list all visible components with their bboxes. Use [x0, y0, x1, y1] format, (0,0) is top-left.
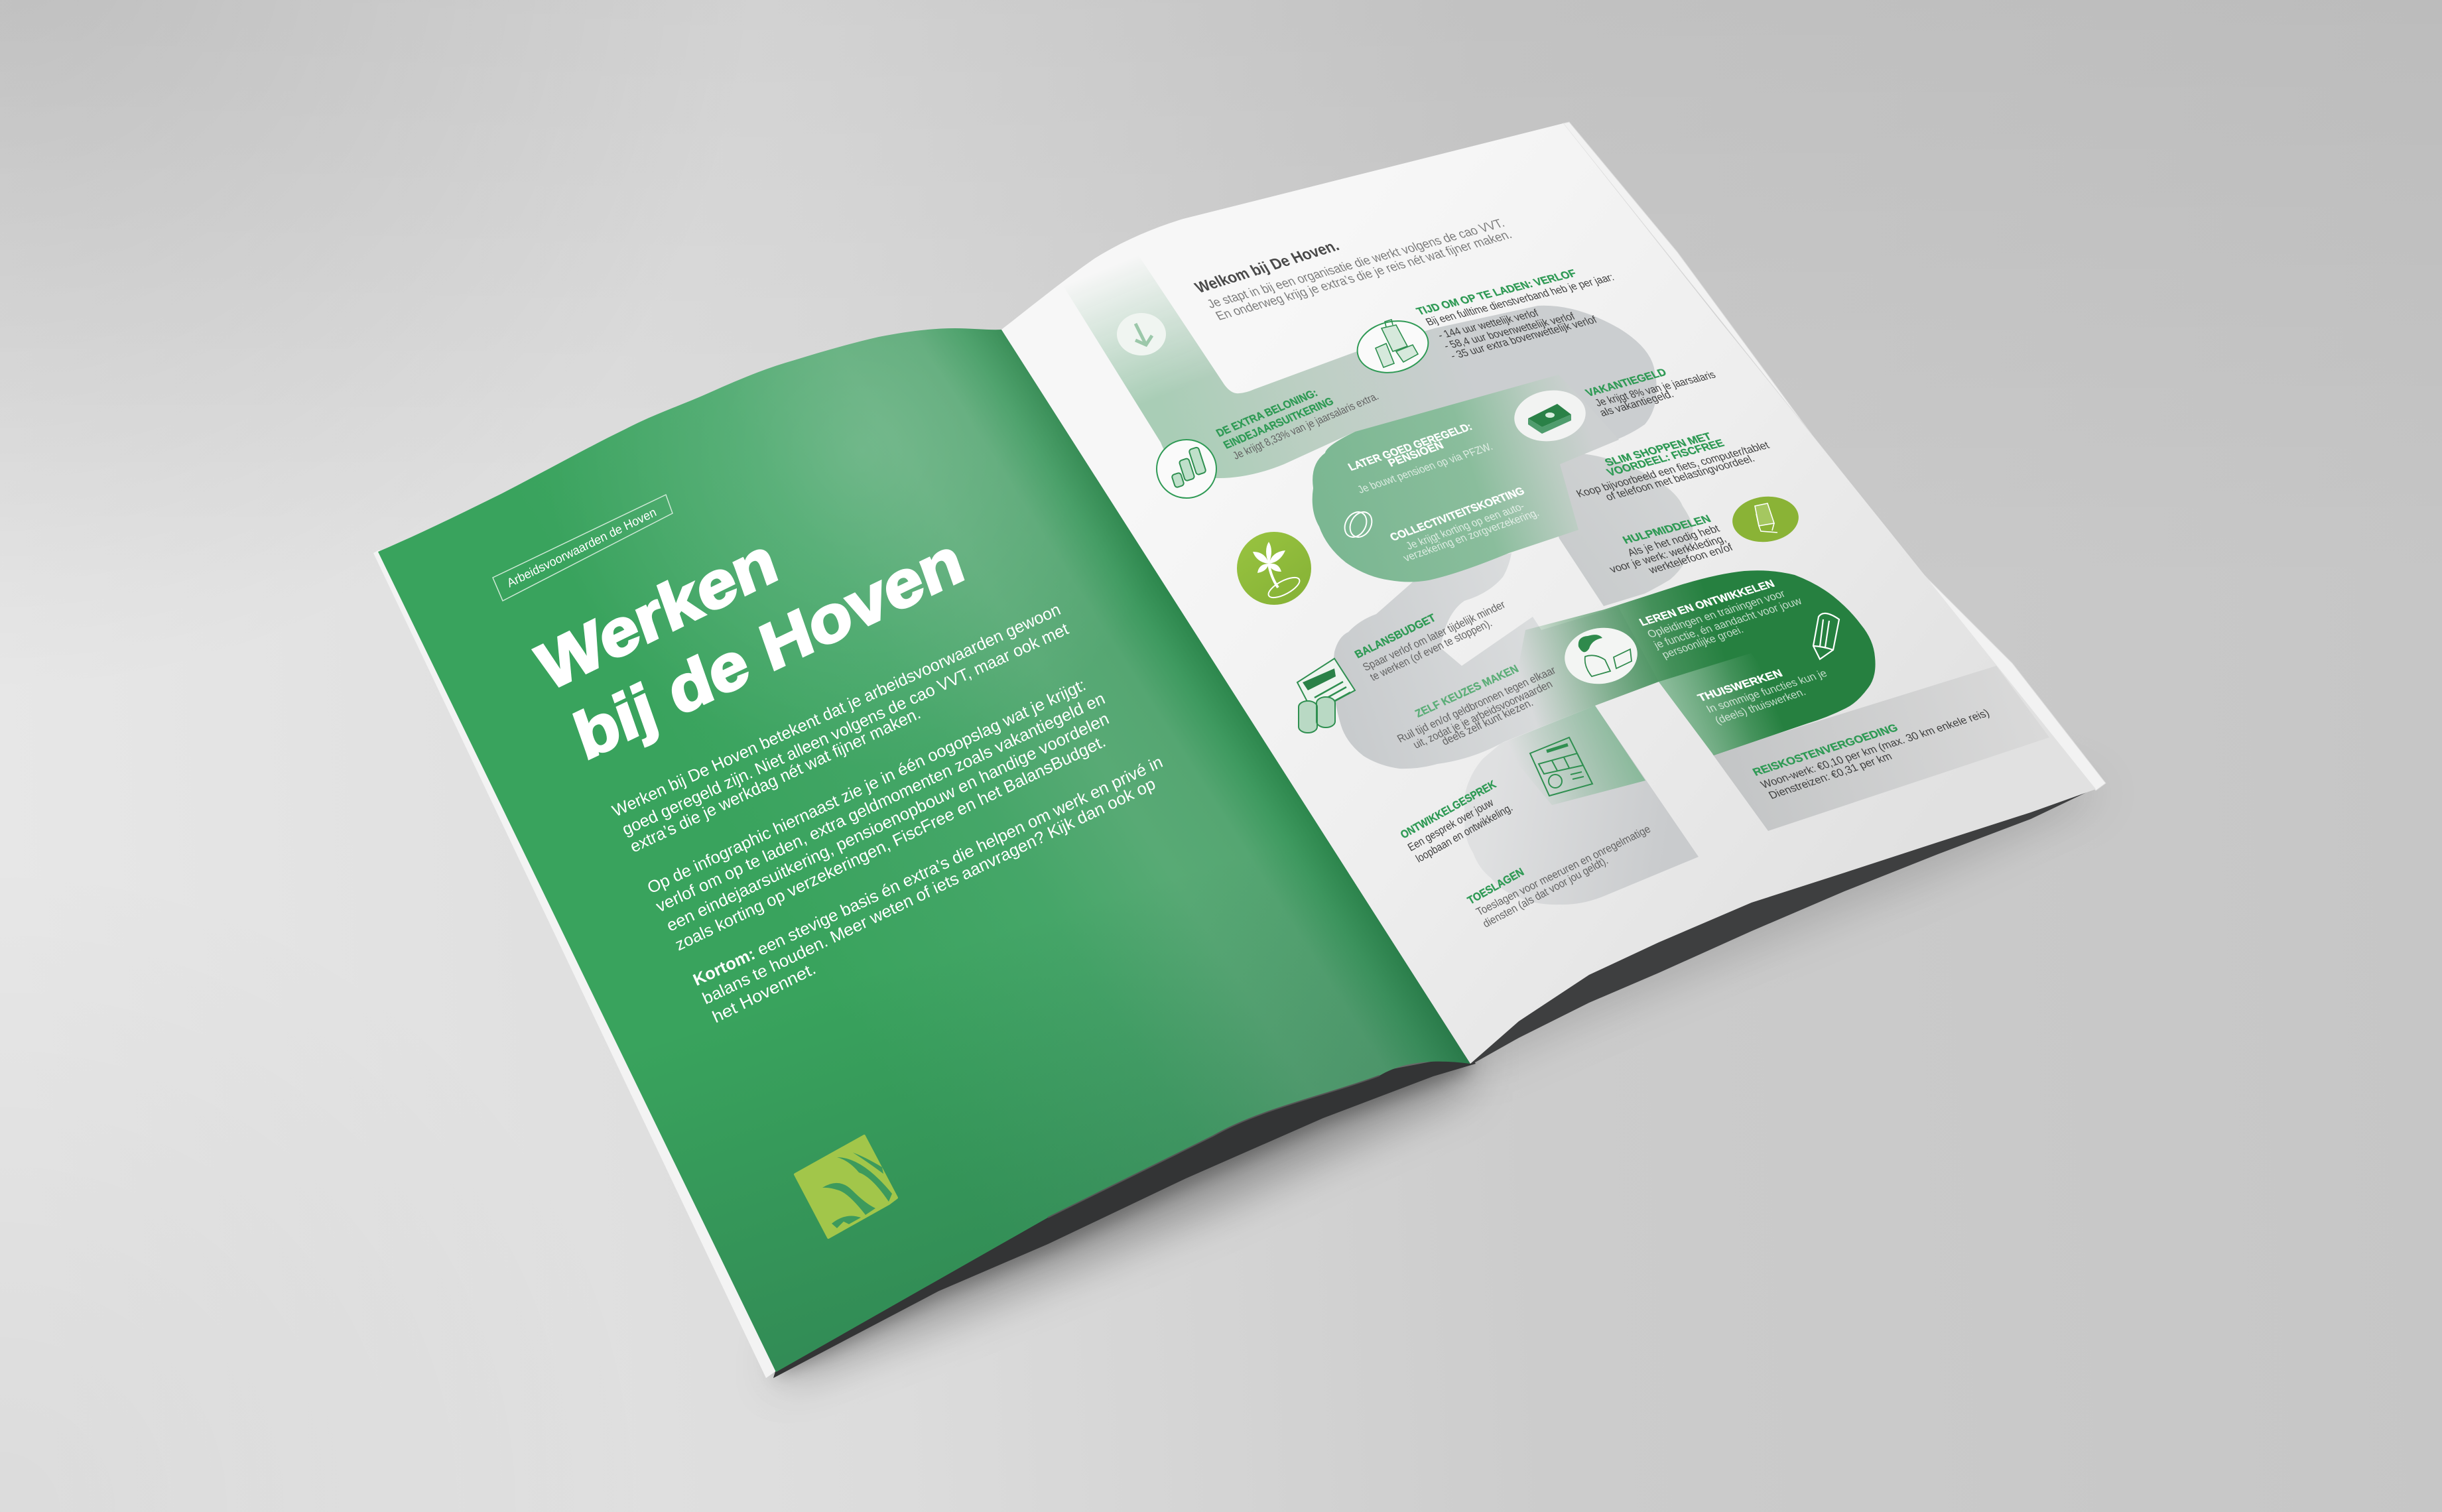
item: zelf keuzes maken: uit, zodat je je arbeidsvoorwaarden: [1411, 678, 1555, 751]
dark underside left: [773, 1054, 1476, 1378]
item: fiscfree: Koop bijvoorbeeld een fiets, computer/tablet: [1574, 440, 1772, 500]
icon: arrow down: [1117, 313, 1166, 355]
item: leren en ontwikkelen: je functie, én aandacht voor jouw: [1651, 595, 1805, 651]
serpentine band: dark green leren block: [1504, 570, 1876, 755]
item: verlof: Bij een fulltime dienstverband heb je per jaar:: [1424, 272, 1616, 328]
item: pensioen: LATER GOED GEREGELD:: [1346, 420, 1474, 473]
serpentine band: start: [1070, 267, 1657, 478]
right paper stack: [1563, 122, 2106, 790]
item: reiskostenvergoeding: Dienstreizen: €0,31 per km: [1766, 750, 1894, 802]
item: thuiswerken: In sommige functies kun je: [1704, 667, 1829, 716]
icon: pencil: [1813, 613, 1839, 659]
second paragraph: zoals korting op verzekeringen, FiscFree en het BalansBudget.: [673, 732, 1108, 954]
intro paragraph: extra’s die je werkdag nét wat fijner maken.: [627, 704, 923, 856]
panel: left green page: [378, 328, 1470, 1372]
item: reiskostenvergoeding: REISKOSTENVERGOEDING: [1750, 722, 1900, 779]
item: hulpmiddelen: voor je werk: werkkleding,: [1608, 533, 1728, 576]
item: zelf keuzes maken: ZELF KEUZES MAKEN: [1413, 663, 1521, 720]
item: thuiswerken: (deels) thuiswerken.: [1712, 686, 1808, 727]
icon: coin: [1340, 508, 1376, 541]
icon: palm island: [1237, 532, 1311, 605]
item: vakantiegeld: Je krijgt 8% van je jaarsalaris: [1593, 369, 1718, 409]
item: hulpmiddelen: [1608, 513, 1736, 576]
reiskosten block: [1712, 666, 2049, 831]
item: eindejaarsuitkering: Je krijgt 8,33% van je jaarsalaris extra.: [1231, 391, 1381, 462]
second paragraph: verlof om op te laden, extra geldmomenten zoals vakantiegeld en: [653, 689, 1108, 916]
item: leren en ontwikkelen: [1637, 578, 1805, 661]
item: hulpmiddelen: Als je het nodig hebt: [1626, 523, 1722, 559]
item: collectiviteitskorting: [1387, 485, 1541, 564]
item: collectiviteitskorting: COLLECTIVITEITSKORTING: [1387, 485, 1527, 544]
title: Werken: [529, 523, 785, 705]
item: collectiviteitskorting: Je krijgt korting op een auto-: [1403, 500, 1527, 552]
item: leren en ontwikkelen: persoonlijke groei.: [1659, 623, 1746, 661]
icon: phone in hand: [1730, 493, 1801, 545]
item: pensioen: [1346, 420, 1495, 496]
third paragraph: het Hovennet.: [710, 960, 818, 1027]
item: zelf keuzes maken: deels zelf kunt kiezen.: [1440, 697, 1535, 748]
item: toeslagen: diensten (als dat voor jou geldt).: [1480, 854, 1610, 930]
item: verlof: [1415, 268, 1616, 362]
second paragraph: Op de infographic hiernaast zie je in één oogopslag wat je krijgt:: [645, 676, 1088, 897]
item: balansbudget: BALANSBUDGET: [1352, 611, 1438, 661]
item: ontwikkelgesprek: [1398, 778, 1515, 865]
dark underside right: [1470, 783, 2106, 1065]
left paper edge: [373, 550, 777, 1378]
icon: money stack: [1511, 386, 1589, 446]
item: thuiswerken: THUISWERKEN: [1695, 667, 1785, 704]
item: ontwikkelgesprek: loopbaan en ontwikkeling.: [1413, 801, 1515, 865]
item: ontwikkelgesprek: Een gesprek over jouw: [1405, 796, 1496, 853]
intro paragraph: Werken bij De Hoven betekent dat je arbeidsvoorwaarden gewoon: [610, 600, 1063, 820]
third paragraph: balans te houden. Meer weten of iets aanvragen? Kijk dan ook op: [700, 775, 1158, 1008]
item: toeslagen: Toeslagen voor meeruren en onregelmatige: [1474, 822, 1653, 918]
item: eindejaarsuitkering: DE EXTRA BELONING:: [1214, 387, 1320, 440]
item: verlof: - 58,4 uur bovenwettelijk verlof: [1442, 311, 1578, 352]
item: zelf keuzes maken: Ruil tijd en/of geldbronnen tegen elkaar: [1395, 664, 1559, 745]
icon: coin stacks: [1157, 440, 1216, 498]
item: toeslagen: TOESLAGEN: [1465, 865, 1526, 907]
item: pensioen: Je bouwt pensioen op via PFZW.: [1355, 440, 1495, 496]
serpentine band: bottom column: [1464, 706, 1699, 905]
item: verlof: - 144 uur wettelijk verlof: [1436, 308, 1541, 342]
third paragraph: Kortom: een stevige basis én extra’s die helpen om werk en privé in: [690, 753, 1165, 989]
intro paragraph: goed geregeld zijn. Niet alleen volgens de cao VVT, maar ook met: [619, 619, 1071, 839]
icon: form document: [1530, 737, 1592, 796]
item: collectiviteitskorting: verzekering en zorgverzekering.: [1401, 507, 1541, 564]
item: ontwikkelgesprek: ONTWIKKELGESPREK: [1398, 778, 1498, 841]
item: fiscfree: of telefoon met belastingvoordeel.: [1604, 453, 1757, 503]
item: verlof: - 35 uur extra bovenwettelijk verlof: [1448, 314, 1600, 362]
item: verlof: TIJD OM OP TE LADEN: VERLOF: [1415, 268, 1578, 318]
item: balansbudget: Spaar verlof om later tijdelijk minder: [1361, 599, 1508, 674]
serpentine band: balansbudget grey: [1333, 553, 1659, 769]
logo: [795, 1136, 897, 1237]
intro block: Je stapt in bij een organisatie die werkt volgens de cao VVT.: [1204, 216, 1507, 311]
item: vakantiegeld: VAKANTIEGELD: [1584, 367, 1669, 399]
icon: suitcases: [1352, 315, 1433, 379]
intro block: Welkom bij De Hoven.: [1192, 237, 1342, 296]
item: hulpmiddelen: werktelefoon en/of: [1645, 541, 1736, 576]
item: leren en ontwikkelen: Opleidingen en trainingen voor: [1645, 588, 1788, 641]
second paragraph: een eindejaarsuitkering, pensioenopbouw en handige voordelen: [664, 710, 1112, 935]
item: vakantiegeld: als vakantiegeld.: [1598, 389, 1676, 419]
item: fiscfree: SLIM SHOPPEN MET: [1603, 431, 1714, 469]
item: pensioen: PENSIOEN: [1385, 439, 1446, 470]
intro block: En onderweg krijg je extra’s die je reis nét wat fijner maken.: [1213, 227, 1514, 323]
item: fiscfree: VOORDEEL: FISCFREE: [1605, 438, 1727, 479]
ground shadow under brochure: [776, 729, 2106, 1383]
icon: budget bills and coins: [1297, 659, 1355, 733]
serpentine band: green pension block: [1313, 375, 1619, 582]
icon: person with laptop: [1561, 623, 1641, 688]
serpentine band: right grey: [1539, 454, 1693, 606]
item: balansbudget: te werken (of even te stoppen).: [1368, 617, 1494, 684]
panel: right infographic page: [1001, 123, 2096, 1064]
item: reiskostenvergoeding: Woon-werk: €0,10 per km (max. 30 km enkele reis): [1758, 707, 1992, 791]
item: leren en ontwikkelen: LEREN EN ONTWIKKELEN: [1637, 578, 1777, 629]
title: bij de Hoven: [566, 523, 972, 774]
item: eindejaarsuitkering: EINDEJAARSUITKERING: [1222, 395, 1336, 452]
item: hulpmiddelen: HULPMIDDELEN: [1621, 513, 1713, 546]
label tag: Arbeidsvoorwaarden de Hoven: [505, 505, 659, 590]
